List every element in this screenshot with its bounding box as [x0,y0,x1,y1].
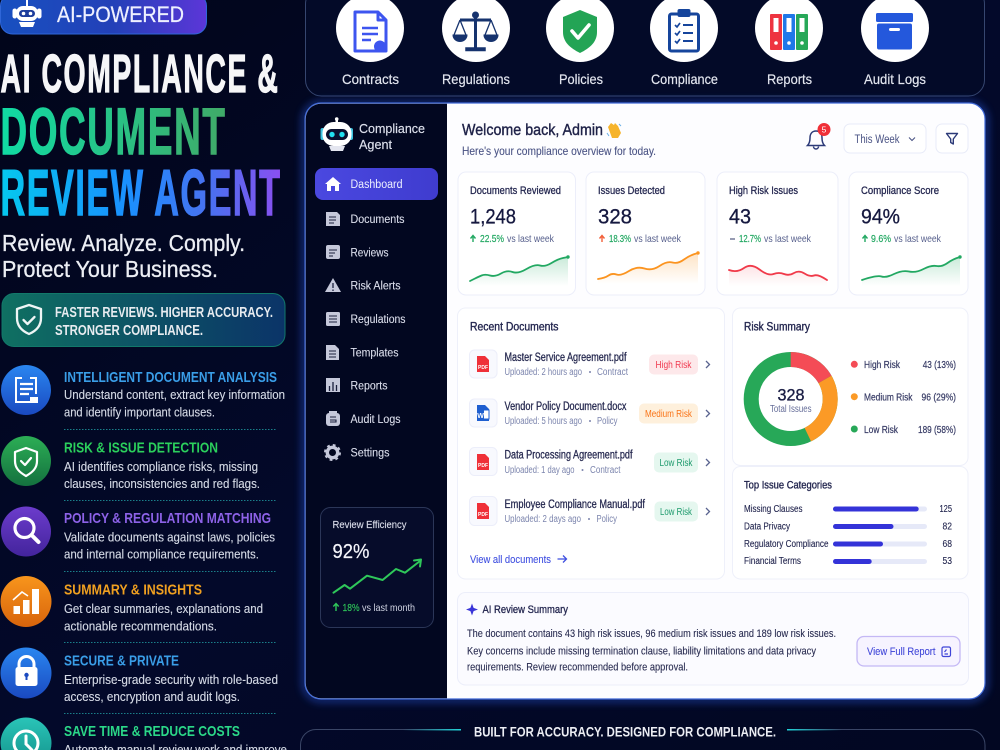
feature: secure and private [0,648,278,704]
delta: vs last week [507,233,555,245]
description: clauses, inconsistencies and red flags. [64,477,260,491]
icon: clipboard [670,9,698,51]
value: 1,248 [470,206,516,228]
tagline [2,230,245,282]
nav: reviews [326,245,389,260]
label: Policies [559,71,603,87]
heading: POLICY & REGULATION MATCHING [64,510,271,527]
panel title: AI Review Summary [482,604,568,616]
category: regulations [442,0,510,87]
donut caption: Total Issues [770,404,812,415]
tagline: Protect Your Business. [2,256,218,282]
risk pill [654,502,698,522]
button: view full report: View Full Report [867,646,936,658]
card: issues detected [586,172,705,295]
left column: features list [0,365,287,750]
description [64,460,260,491]
subheading: Here's your compliance overview for today. [462,144,656,158]
label: Issues Detected [598,185,665,197]
sparkline [470,255,570,286]
nav: reports [326,378,388,392]
tagline: Review. Analyze. Comply. [2,230,245,256]
delta [862,233,942,245]
icon: pdf: PDF [478,512,488,518]
file meta: Policy [596,514,617,525]
panel: recent documents [458,308,724,579]
icon: notifications bell [808,123,830,149]
risk pill [649,354,698,374]
icon: pdf: PDF [478,365,488,371]
callout text: FASTER REVIEWS. HIGHER ACCURACY. [55,305,273,321]
risk pill: Low Risk [660,507,693,518]
brand name [359,121,425,152]
summary text: The document contains 43 high risk issues, 96 medium risk issues and 189 low risk issues. [467,628,836,640]
chevron [706,361,710,368]
icon: pdf: PDF [478,463,488,469]
icon: scales [453,12,498,50]
delta: vs last week [894,233,942,245]
legend: high risk [851,359,956,371]
icon: padlock [16,657,38,686]
label: High Risk Issues [729,185,798,197]
description [64,602,263,634]
nav: settings [325,445,390,460]
heading: SAVE TIME & REDUCE COSTS [64,723,240,740]
accent: left [403,729,461,730]
label: Risk Alerts [350,280,401,292]
file meta: Contract [597,367,628,378]
icon: clock [14,731,38,750]
icon: document analysis [16,378,38,403]
nav: audit logs [326,411,401,426]
risk pill: Medium Risk [645,409,693,420]
description: AI identifies compliance risks, missing [64,460,258,474]
bar: regulatory compliance [744,539,952,550]
risk pill [639,404,698,424]
panel title: Risk Summary [744,322,810,334]
icon: badge robot [12,0,42,27]
card: review efficiency [320,508,434,628]
bar: missing clauses: Missing Clauses [744,504,802,515]
panel: top issue categories [732,466,968,579]
sparkline [862,255,962,286]
legend: high risk: High Risk [864,359,901,371]
title line 3: REVIEW AGENT [0,156,282,229]
legend: high risk: 43 (13%) [923,359,956,371]
icon: waving hand [607,123,621,138]
delta: 18.3% [609,233,631,245]
label: Regulations [442,71,510,87]
icon: word [477,405,489,421]
value: 328 [598,206,632,228]
description: and internal compliance requirements. [64,548,259,562]
chevron [706,508,710,515]
title line 1: AI COMPLIANCE & [0,44,280,104]
file meta: Uploaded: 2 hours ago [504,367,582,378]
description [64,530,275,562]
description: Get clear summaries, explanations and [64,602,263,616]
nav: templates [326,345,399,360]
legend: low risk: Low Risk [864,424,899,436]
label: Documents [350,214,405,226]
description: Validate documents against laws, policies [64,530,275,544]
feature: policy matching [1,506,275,562]
card delta: 18% [342,602,360,614]
icon: pdf [477,503,489,519]
icon: agent robot [320,117,353,151]
delta: 12.7% [739,233,761,245]
panel: risk summary [732,308,968,466]
file name: Vendor Policy Document.docx [504,401,627,413]
icon: home [325,177,341,191]
delta: 22.5% [480,233,504,245]
panel: document categories [306,0,984,96]
bar: missing clauses [744,504,952,515]
control: filter button [936,124,968,153]
icon: report [942,647,950,656]
badge label: AI-POWERED [57,2,184,27]
description: actionable recommendations. [64,620,217,634]
badge: AI-powered [0,0,206,34]
label: Documents Reviewed [470,185,561,197]
callout text: STRONGER COMPLIANCE. [55,323,203,339]
file meta: Uploaded: 5 hours ago [504,416,582,427]
document row 3 [470,448,710,476]
bar: data privacy [744,522,952,532]
nav: documents [326,212,405,226]
feature: summary and insights [0,576,263,634]
file meta: Uploaded: 1 day ago [504,465,575,476]
card value: 92% [332,541,370,563]
category: policies [546,0,614,87]
delta: vs last week [764,233,812,245]
sparkline [598,251,700,284]
bar: missing clauses: 125 [940,504,952,515]
bar: regulatory compliance: Regulatory Compliance [744,539,829,550]
chevron [706,410,710,417]
icon: word: W [477,413,484,420]
document row 2 [470,399,710,427]
delta: 9.6% [871,233,891,245]
feature: risk detection [1,436,260,491]
description: access, encryption and audit logs. [64,690,240,704]
icon: callout shield [17,305,41,334]
donut total: 328 [778,386,804,404]
category: audit logs [861,0,929,87]
category: compliance [650,0,718,87]
callout text [55,305,273,339]
label: Dashboard [350,179,402,191]
card: documents reviewed [458,172,576,295]
risk pill [654,452,698,472]
panel: footer strip [300,724,985,750]
title line 2: DOCUMENT [0,94,227,168]
category: reports [755,0,823,87]
icon: pdf [477,356,489,372]
label: Compliance [651,71,718,87]
file meta: Policy [597,416,618,427]
nav: regulations [326,312,406,326]
label: Compliance Score [861,185,939,197]
brand name: Agent [359,137,392,152]
icon: binders [770,14,808,50]
footer heading: BUILT FOR ACCURACY. DESIGNED FOR COMPLIANCE. [474,724,776,740]
label: Reports [767,71,812,87]
file meta: Contract [590,465,621,476]
summary text [467,628,836,674]
label: Audit Logs [350,414,401,426]
card delta [333,602,415,614]
document row 4 [470,496,710,526]
summary text: requirements. Review recommended before approval. [467,662,688,674]
icon: risk shield [15,448,37,476]
accent: right [787,729,842,730]
bar: financial terms [744,556,952,567]
label: Reviews [350,248,389,260]
dashboard glow [304,103,986,700]
summary text: Key concerns include missing termination clause, liability limitations and data privacy [467,646,816,658]
category: contracts [336,0,404,87]
description: Understand content, extract key information [64,388,285,402]
risk pill: Low Risk [660,458,693,469]
efficiency line chart [334,560,421,593]
delta: vs last week [634,233,682,245]
button: view full report [857,636,960,666]
feature: save time [0,718,287,750]
description [64,388,285,420]
heading: welcome [462,122,656,158]
chevron [706,459,710,466]
heading: welcome: Welcome back, Admin [462,122,603,139]
bar: data privacy: 82 [942,522,952,532]
bar: financial terms: 53 [942,556,952,567]
description: and identify important clauses. [64,406,215,420]
bar: regulatory compliance: 68 [942,539,952,550]
document row 1 [470,350,710,378]
label: Contracts [342,71,399,87]
icon: shield check [563,10,597,53]
delta [600,233,682,245]
value: 94% [861,206,900,228]
risk pill: High Risk [656,360,692,371]
heading: RISK & ISSUE DETECTION [64,440,218,456]
donut chart [751,360,830,438]
bar: financial terms: Financial Terms [744,556,801,567]
feature: document analysis [1,365,285,420]
card: high risk issues [717,172,838,295]
delta [470,233,555,245]
label: Reports [350,380,388,392]
description [64,673,278,704]
nav: dashboard active [315,168,438,200]
callout: faster reviews [2,294,285,346]
icon: contract [355,12,386,51]
file name: Employee Compliance Manual.pdf [504,499,646,511]
panel: dashboard [305,103,985,699]
icon: sparkle [466,604,478,616]
panel title: Top Issue Categories [744,480,832,492]
heading: SECURE & PRIVATE [64,652,179,670]
label: Templates [350,348,399,360]
icon: archive box [876,13,913,50]
icon: notifications bell: 5 [822,124,827,134]
icon: pdf [477,454,489,470]
label: Audit Logs [864,71,926,87]
file name: Data Processing Agreement.pdf [504,450,633,462]
icon: bar chart [13,589,39,614]
brand name: Compliance [359,121,425,136]
label: Settings [350,448,390,460]
legend: medium risk: Medium Risk [864,392,913,404]
bar: data privacy: Data Privacy [744,522,790,532]
description: Enterprise-grade security with role-based [64,673,278,687]
value: 43 [729,206,751,228]
panel title: Recent Documents [470,322,559,334]
left column: headline [0,0,285,346]
card delta: vs last month [362,602,415,614]
legend: low risk [851,424,956,436]
card title: Review Efficiency [332,519,407,531]
icon: magnifier [15,518,38,542]
file name: Master Service Agreement.pdf [504,352,627,364]
card: compliance score [849,172,968,295]
legend: medium risk: 96 (29%) [922,392,956,404]
panel: AI review summary [458,592,968,685]
control: this week dropdown: This Week [854,134,900,146]
heading: INTELLIGENT DOCUMENT ANALYSIS [64,369,277,386]
legend: medium risk [851,392,956,404]
panel: sidebar [306,104,447,698]
control: this week dropdown [844,124,926,153]
heading: SUMMARY & INSIGHTS [64,582,202,598]
legend: low risk: 189 (58%) [918,424,956,436]
file meta: Uploaded: 2 days ago [504,514,581,525]
sparkline [729,266,827,286]
nav: risk alerts [325,278,401,292]
delta [730,233,812,245]
link: view all documents: View all documents [470,554,551,566]
label: Regulations [350,314,406,326]
